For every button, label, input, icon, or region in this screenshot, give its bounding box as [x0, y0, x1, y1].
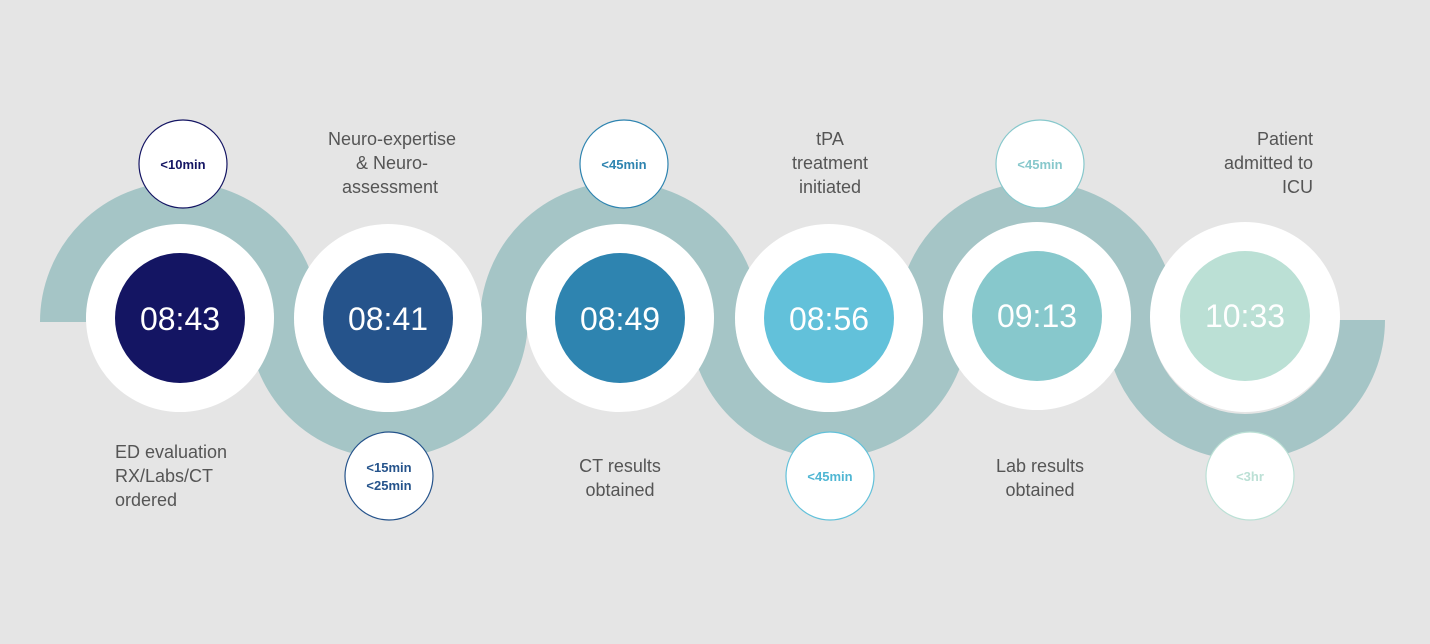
badge <3hr — [1206, 432, 1294, 520]
label: tPA: tPA — [816, 129, 844, 149]
step 4 circle — [735, 224, 923, 412]
step 6 circle: 10:33 — [1205, 298, 1285, 334]
label: ED evaluation: RX/Labs/CT — [115, 466, 213, 486]
label: tPA — [792, 129, 868, 197]
step 4 circle: 08:56 — [789, 301, 869, 337]
label: Patient admitted: admitted to — [1224, 153, 1313, 173]
badge <15min <25min: <15min — [366, 460, 412, 475]
label: CT results: obtained — [585, 480, 655, 500]
wavy band — [63, 205, 1362, 437]
label: ED evaluation: ordered — [115, 490, 177, 510]
step 3 circle: 08:49 — [580, 301, 660, 337]
label: Patient admitted — [1224, 129, 1313, 197]
badge <45min (4) — [786, 432, 874, 520]
label: CT results — [579, 456, 661, 500]
label: Neuro-expertise — [328, 129, 456, 197]
badge <15min <25min: <25min — [366, 478, 412, 493]
badge <45min (3): <45min — [601, 157, 647, 172]
label: Neuro-expertise: assessment — [342, 177, 438, 197]
badge <15min <25min — [345, 432, 433, 520]
step 6 circle — [1150, 222, 1340, 412]
label: Patient admitted: Patient — [1257, 129, 1313, 149]
label: tPA: treatment — [792, 153, 868, 173]
label: Lab results — [996, 456, 1084, 500]
badge <3hr: <3hr — [1236, 469, 1264, 484]
badge <45min (5) — [996, 120, 1084, 208]
label: tPA: initiated — [799, 177, 861, 197]
badge <45min (4): <45min — [807, 469, 853, 484]
label: Neuro-expertise: Neuro-expertise — [328, 129, 456, 149]
step 2 circle — [294, 224, 482, 412]
badge <10min — [139, 120, 227, 208]
label: Lab results: obtained — [1005, 480, 1075, 500]
step 1 circle: 08:43 — [140, 301, 220, 337]
badge <10min: <10min — [160, 157, 206, 172]
step 2 circle: 08:41 — [348, 301, 428, 337]
step 5 circle — [943, 222, 1131, 410]
label: ED evaluation — [115, 442, 227, 510]
label: CT results: CT results — [579, 456, 661, 476]
step 3 circle — [526, 224, 714, 412]
label: ED evaluation: ED evaluation — [115, 442, 227, 462]
label: Lab results: Lab results — [996, 456, 1084, 476]
step 5 circle: 09:13 — [997, 298, 1077, 334]
label: Patient admitted: ICU — [1282, 177, 1313, 197]
label: Neuro-expertise: & Neuro- — [356, 153, 428, 173]
step 1 circle — [86, 224, 274, 412]
badge <45min (3) — [580, 120, 668, 208]
badge <45min (5): <45min — [1017, 157, 1063, 172]
